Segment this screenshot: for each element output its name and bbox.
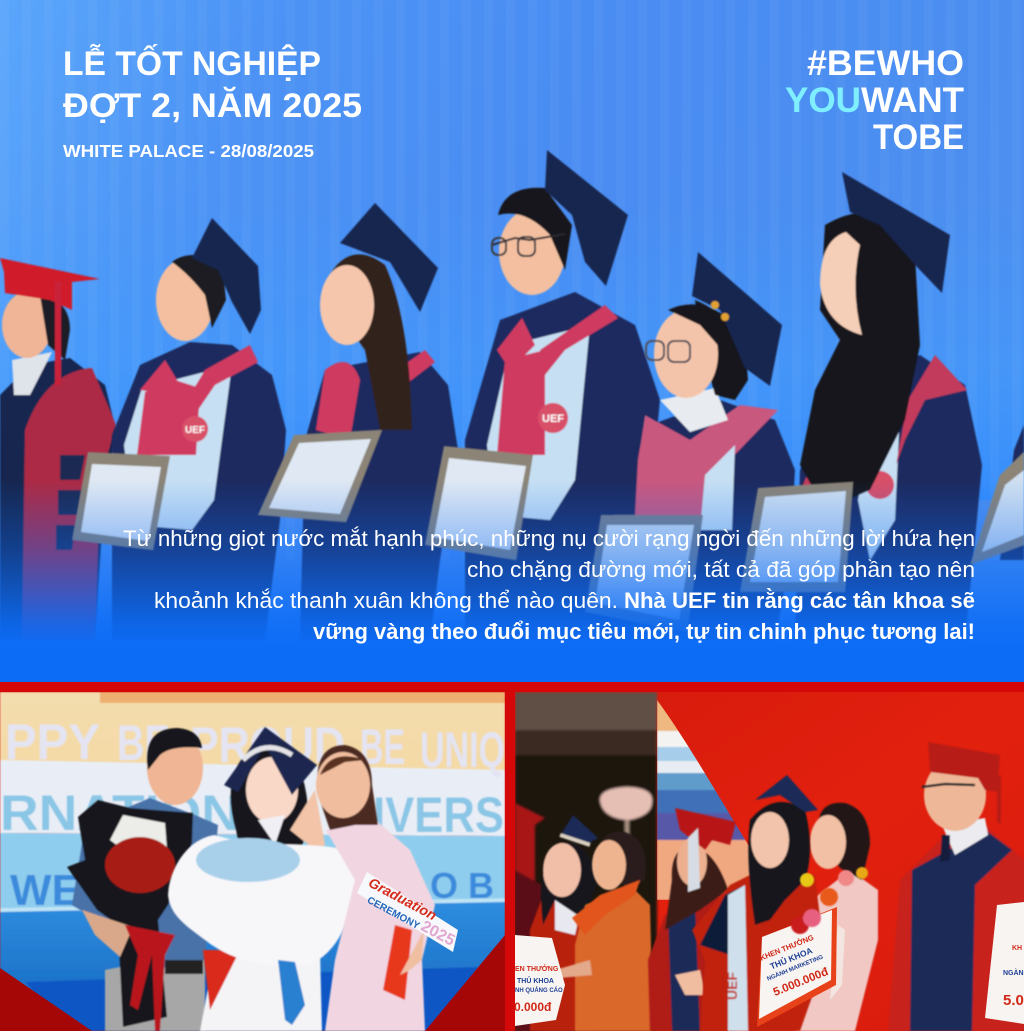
backdrop with slogan bands: BE	[117, 715, 170, 771]
hashtag slogan	[785, 44, 964, 157]
hashtag slogan: WANT	[861, 81, 964, 120]
figure: mother in pink ao dai	[316, 745, 435, 1031]
figure: graduate six	[740, 172, 982, 640]
hashtag slogan: TOBE	[873, 118, 964, 157]
figure: woman in orange dress	[555, 832, 653, 1031]
hashtag slogan: YOU	[785, 81, 861, 120]
award sign with flowers: 5.000.000đ	[772, 966, 830, 999]
figure: graduate four	[425, 150, 660, 640]
panel: family photo	[0, 692, 505, 1031]
figure: graduate at right edge	[970, 425, 1024, 565]
graduation ceremony sign: Graduation	[366, 874, 439, 923]
award sign with flowers: NGÀNH MARKETING	[766, 953, 825, 983]
backdrop with slogan bands: IVERS	[373, 787, 504, 843]
panel: award stage photo	[514, 692, 1024, 1031]
paragraph: vững vàng theo đuổi mục tiêu mới, tự tin chinh phục tương lai!	[313, 619, 975, 644]
rainbow wedge	[657, 700, 750, 900]
graduation ceremony sign: 2025	[418, 918, 458, 950]
figure: graduate two	[72, 218, 286, 640]
figure: graduate four: UEF	[542, 413, 564, 425]
backdrop with slogan bands: UNIQ	[420, 722, 505, 778]
left partial award sign: 0.000đ	[514, 1000, 552, 1014]
figure: professor at left	[0, 258, 116, 640]
red stage backdrop	[515, 692, 1024, 1031]
graduation ceremony sign	[357, 872, 464, 952]
award sign with flowers: KHEN THƯỞNG	[759, 933, 815, 963]
title	[63, 44, 362, 125]
figure: graduate with tiara	[530, 815, 598, 1031]
red corner: bottom right	[425, 935, 505, 1031]
title: ĐỢT 2, NĂM 2025	[63, 87, 362, 125]
hashtag slogan: #BEWHO	[807, 44, 964, 83]
panel: graduates hero photo	[0, 0, 1024, 682]
paragraph: Nhà UEF tin rằng các tân khoa sẽ	[624, 588, 975, 613]
backdrop with slogan bands: RNATION	[0, 785, 240, 841]
paragraph	[123, 526, 975, 644]
figure: father with black bouquet	[67, 728, 218, 1031]
subtitle: venue and date: WHITE PALACE - 28/08/2025	[63, 141, 314, 161]
right partial award sign: KH	[1012, 945, 1022, 952]
graduation ceremony sign: CEREMONY	[365, 895, 422, 932]
backdrop with slogan bands: BE	[360, 719, 405, 775]
left partial award sign	[514, 935, 565, 1026]
figure: top graduate with sash: UEF	[724, 972, 740, 1000]
backdrop with slogan bands: WE	[10, 866, 81, 915]
left partial award sign: NH QUẢNG CÁO	[515, 987, 563, 994]
left partial award sign: THỦ KHOA	[517, 976, 554, 985]
backdrop with slogan bands: PROUD	[190, 717, 345, 773]
red corner: bottom left	[0, 968, 92, 1031]
figure: graduate two: UEF	[185, 425, 205, 436]
paragraph: khoảnh khắc thanh xuân không thể nào quên.	[154, 588, 618, 613]
figure: graduate five	[585, 252, 795, 640]
figure: far-left graduate	[515, 803, 545, 1031]
right partial award sign	[985, 902, 1024, 1024]
award sign with flowers: THỦ KHOA	[768, 944, 814, 971]
right partial award sign: 5.0	[1003, 992, 1024, 1009]
figure: top graduate with sash	[692, 775, 825, 1031]
backdrop with slogan bands: O B	[430, 865, 494, 906]
award sign with flowers	[757, 867, 868, 1027]
figure: mother with flowers	[795, 803, 878, 1031]
figure: professor at right	[888, 742, 1024, 1031]
backdrop with slogan bands	[0, 692, 505, 1031]
figure: graduate with trophy	[648, 808, 736, 1031]
blue fade overlay	[0, 480, 1024, 682]
paragraph: cho chặng đường mới, tất cả đã góp phần tạo nên	[467, 557, 975, 582]
dark venue background	[515, 692, 657, 1031]
left partial award sign: EN THƯỞNG	[515, 964, 559, 973]
paragraph: Từ những giọt nước mắt hạnh phúc, những nụ cười rạng ngời đến những lời hứa hẹn	[123, 526, 975, 551]
title: LỄ TỐT NGHIỆP	[63, 44, 321, 83]
backdrop with slogan bands: PPY	[5, 714, 100, 770]
figure: graduate three	[258, 203, 458, 640]
figure: graduate with white bouquet	[168, 727, 361, 1031]
